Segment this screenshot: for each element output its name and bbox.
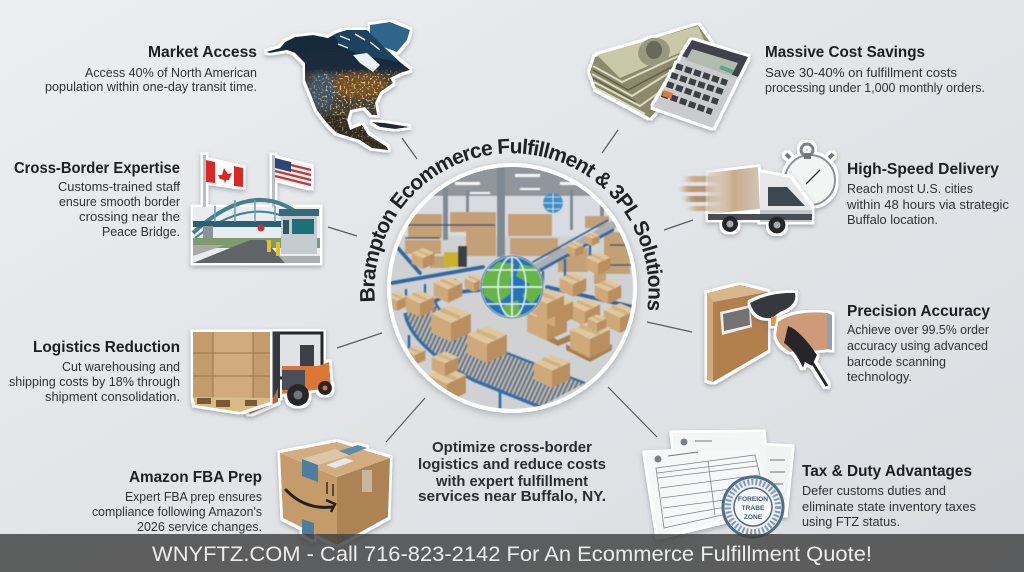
pallet and forklift [193, 332, 332, 414]
block: Market Access: Market Access [148, 44, 257, 61]
block: Precision Accuracy: Achieve over 99.5% order [847, 323, 989, 337]
block: Tax and Duty Advantages: Defer customs duties and [802, 484, 946, 498]
barcode scanner and box [707, 285, 832, 386]
block: Market Access: population within one-day transit time. [45, 80, 257, 94]
block: High-Speed Delivery: High-Speed Delivery [847, 161, 999, 178]
block: Tax and Duty Advantages: eliminate state inventory taxes [802, 500, 976, 514]
block: Cross-Border Expertise: crossing near the [79, 210, 180, 224]
US flag [275, 158, 311, 188]
flags and bridge [193, 155, 320, 263]
block: Logistics Reduction: shipment consolidation. [45, 390, 180, 404]
block: Tax and Duty Advantages: Tax & Duty Advantages [802, 463, 972, 480]
block: Precision Accuracy: barcode scanning [847, 355, 946, 369]
block: Precision Accuracy [847, 303, 990, 384]
block: Amazon FBA Prep: Expert FBA prep ensures [125, 490, 262, 504]
block: Amazon FBA Prep: compliance following Amazon's [92, 505, 262, 519]
smile arrow [286, 490, 332, 507]
block: Precision Accuracy: accuracy using advanced [847, 339, 988, 353]
block: Amazon FBA Prep: Amazon FBA Prep [129, 469, 262, 486]
footer bar: WNYFTZ.COM - Call 716-823-2142 For An Ecommerce Fulfillment Quote! [152, 543, 872, 566]
block: Massive Cost Savings: Massive Cost Savings [765, 44, 925, 61]
Foreign Trade Zone stamp: FOREION [738, 496, 768, 503]
block: Cross-Border Expertise: Cross-Border Expertise [14, 160, 180, 177]
block: High-Speed Delivery [846, 161, 1009, 227]
truck [708, 167, 812, 234]
central caption: logistics and reduce costs [418, 456, 606, 473]
documents [645, 432, 792, 537]
block: Cross-Border Expertise [14, 160, 181, 239]
block: High-Speed Delivery: within 48 hours via strategic [846, 198, 1009, 212]
block: High-Speed Delivery: Buffalo location. [847, 213, 938, 227]
block: Cross-Border Expertise: ensure smooth border [59, 195, 180, 209]
block: Precision Accuracy: technology. [847, 370, 912, 384]
flag poles [193, 155, 320, 263]
central caption: services near Buffalo, NY. [418, 488, 606, 505]
Foreign Trade Zone stamp: TRABE [742, 505, 765, 512]
city lights [305, 67, 404, 148]
cardboard box [707, 285, 768, 382]
map of North America [260, 20, 420, 160]
boxes [391, 292, 408, 312]
Hudson Bay [353, 53, 380, 72]
block: Logistics Reduction: Logistics Reduction [33, 339, 180, 356]
guard booth [279, 209, 319, 254]
money and calculator [590, 25, 748, 128]
small globe [543, 193, 563, 213]
cash stack [590, 25, 712, 118]
block: Tax and Duty Advantages: using FTZ status. [802, 515, 900, 529]
forklift [246, 332, 332, 414]
central globe [480, 255, 546, 320]
Canadian flag [206, 160, 243, 187]
Amazon box [280, 442, 390, 545]
block: Massive Cost Savings: Save 30-40% on fulfillment costs [765, 66, 957, 80]
block: Cross-Border Expertise: Peace Bridge. [102, 225, 180, 239]
block: Amazon FBA Prep [92, 469, 262, 534]
block: Market Access: Access 40% of North American [85, 66, 257, 80]
delivery truck and stopwatch [684, 144, 835, 234]
block: Tax and Duty Advantages [802, 463, 976, 529]
small forklift [444, 252, 458, 267]
block: Logistics Reduction: Cut warehousing and [62, 360, 180, 374]
Foreign Trade Zone stamp [723, 477, 783, 537]
block: Massive Cost Savings [765, 44, 985, 95]
central caption: with expert fulfillment [435, 473, 588, 490]
block: Amazon FBA Prep: 2026 service changes. [137, 520, 262, 534]
motion blur streaks [684, 176, 722, 211]
block: Logistics Reduction: shipping costs by 18% through [9, 375, 180, 389]
back shelves [405, 212, 630, 284]
central caption [418, 439, 606, 505]
conveyors [392, 220, 633, 307]
central warehouse image [380, 160, 644, 420]
pallet of boxes [193, 332, 270, 412]
block: Massive Cost Savings: processing under 1,000 monthly orders. [765, 81, 985, 95]
bridge [193, 200, 320, 263]
connector lines [328, 130, 693, 442]
block: High-Speed Delivery: Reach most U.S. cities [847, 182, 973, 196]
block: Precision Accuracy: Precision Accuracy [847, 303, 990, 320]
Foreign Trade Zone stamp: ZONE [744, 514, 763, 521]
footer bar [0, 534, 1024, 572]
hand holding scanner [750, 293, 832, 386]
calculator [653, 40, 748, 128]
block: Logistics Reduction [9, 339, 180, 404]
central caption: Optimize cross-border [432, 439, 592, 456]
stopwatch [785, 144, 835, 205]
customs documents and stamp [645, 432, 792, 537]
block: Cross-Border Expertise: Customs-trained staff [58, 180, 181, 194]
curved title: Brampton Ecommerce Fulfillment & 3PL Solutions [360, 138, 663, 310]
block: Market Access [45, 44, 257, 94]
